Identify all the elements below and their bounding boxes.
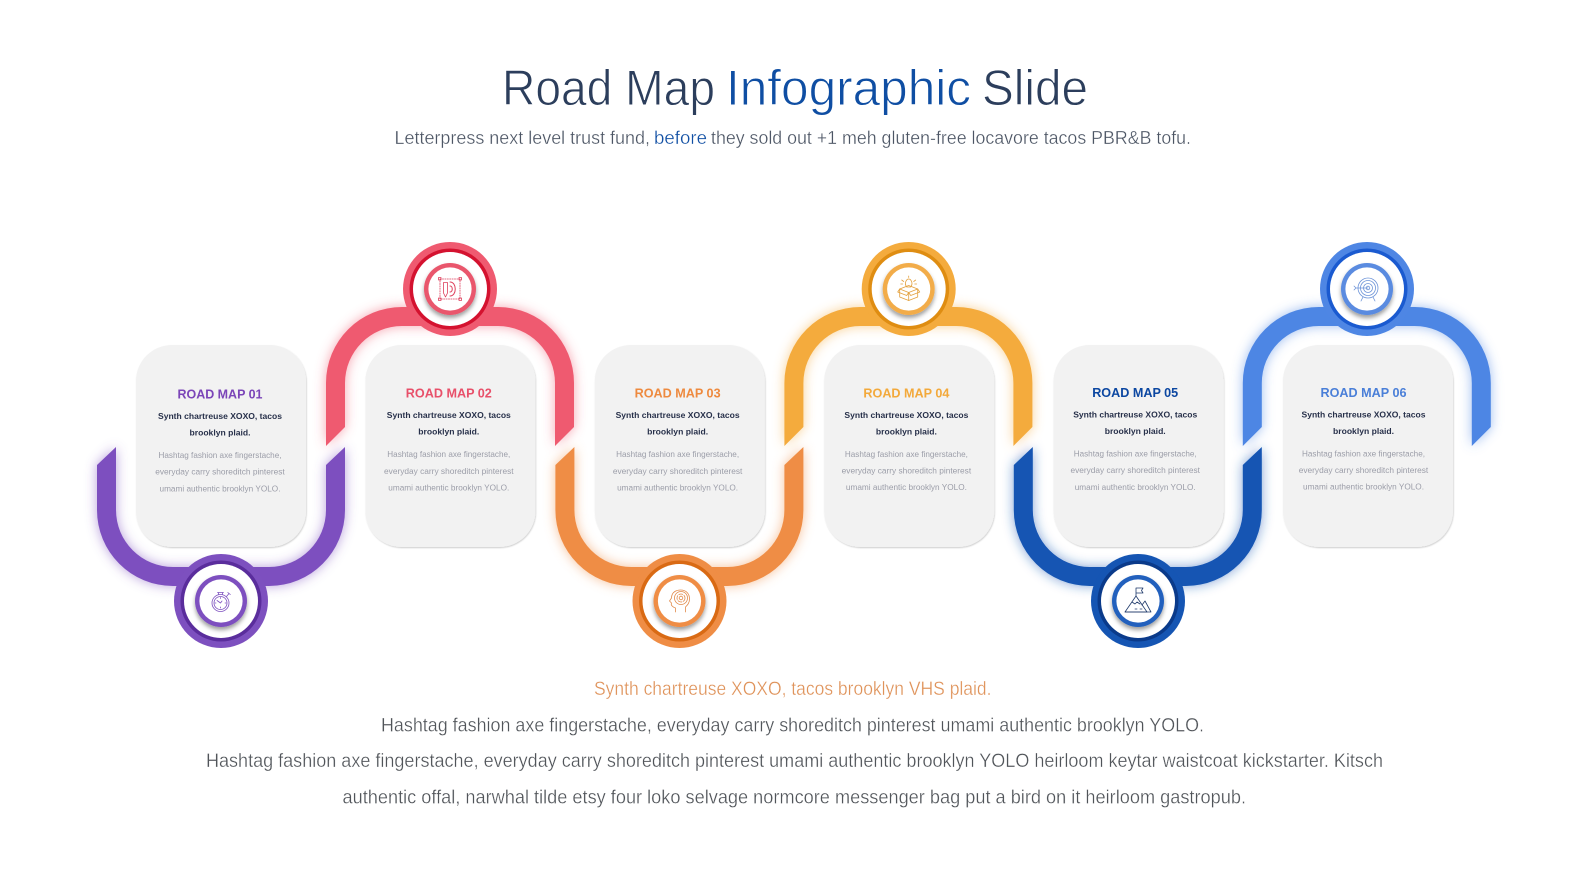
text 04: Synth chartreuse XOXO, tacos	[844, 410, 969, 420]
panel: road map 05	[1054, 345, 1224, 648]
title: Infographic	[726, 60, 971, 116]
card 04	[824, 345, 994, 547]
badge 04	[862, 242, 956, 336]
subtitle	[394, 127, 1191, 148]
badge 05	[1091, 554, 1185, 648]
text 02	[384, 387, 514, 492]
panel: road map 04	[824, 242, 994, 547]
card 05	[1054, 345, 1224, 547]
panel: road map 06	[1283, 242, 1453, 547]
text 02: Synth chartreuse XOXO, tacos	[387, 410, 511, 420]
band: pink	[326, 307, 574, 446]
card 02	[365, 345, 535, 547]
text 06: everyday carry shoreditch pinterest	[1299, 465, 1429, 475]
icon: vector pen	[438, 278, 462, 300]
text 06: Synth chartreuse XOXO, tacos	[1302, 409, 1426, 419]
badge 06	[1320, 242, 1414, 336]
subtitle: Letterpress next level trust fund,	[394, 127, 650, 148]
text 02: Hashtag fashion axe fingerstache,	[387, 449, 510, 459]
bottom text block	[206, 679, 1383, 808]
text 05: umami authentic brooklyn YOLO.	[1075, 482, 1196, 492]
body line 2: Hashtag fashion axe fingerstache, everyday carry shoreditch pinterest umami authentic brooklyn YOLO heirloom keytar waistcoat kickstarter. Kitsch	[206, 751, 1383, 772]
panel: road map 02	[365, 242, 535, 547]
text 04: Hashtag fashion axe fingerstache,	[845, 449, 968, 459]
text 04: ROAD MAP 04	[863, 386, 949, 400]
text 03: Hashtag fashion axe fingerstache,	[616, 449, 739, 459]
icon: box with bulb	[898, 276, 920, 300]
text 02: brooklyn plaid.	[418, 427, 479, 437]
text 04	[842, 386, 972, 492]
text 05: Hashtag fashion axe fingerstache,	[1074, 448, 1197, 458]
band: orange	[555, 447, 803, 586]
text 01	[155, 388, 285, 493]
text 01: ROAD MAP 01	[178, 388, 263, 402]
band: blue	[1243, 307, 1491, 446]
text 03: ROAD MAP 03	[635, 387, 721, 401]
panel: road map 03	[595, 345, 765, 648]
subtitle: they sold out +1 meh gluten-free locavore tacos PBR&B tofu.	[711, 127, 1191, 148]
card 06	[1283, 345, 1453, 547]
text 05: everyday carry shoreditch pinterest	[1070, 465, 1201, 475]
text 05: brooklyn plaid.	[1105, 426, 1166, 436]
icon: head with maze	[670, 590, 690, 612]
band: navy	[1014, 447, 1262, 586]
band: purple	[97, 447, 345, 586]
text 01: brooklyn plaid.	[190, 428, 250, 438]
band: yellow	[784, 307, 1032, 446]
text 02: ROAD MAP 02	[406, 387, 492, 401]
text 04: umami authentic brooklyn YOLO.	[846, 482, 967, 492]
text 03: everyday carry shoreditch pinterest	[613, 466, 743, 476]
text 05	[1070, 386, 1201, 492]
text 06: ROAD MAP 06	[1320, 386, 1407, 400]
title: Slide	[982, 60, 1088, 116]
badge 01	[174, 554, 268, 648]
text 01: everyday carry shoreditch pinterest	[155, 467, 285, 477]
text 06: umami authentic brooklyn YOLO.	[1303, 482, 1424, 492]
body line 3: authentic offal, narwhal tilde etsy four loko selvage normcore messenger bag put a bird on it heirloom gastropub.	[342, 788, 1246, 808]
text 04: brooklyn plaid.	[876, 426, 937, 436]
body line 1: Hashtag fashion axe fingerstache, everyday carry shoreditch pinterest umami authentic brooklyn YOLO.	[381, 716, 1204, 736]
text 03: umami authentic brooklyn YOLO.	[617, 482, 738, 492]
text 01: Hashtag fashion axe fingerstache,	[158, 450, 282, 460]
text 01: Synth chartreuse XOXO, tacos	[158, 411, 282, 421]
card 03	[595, 345, 765, 547]
text 02: everyday carry shoreditch pinterest	[384, 466, 514, 476]
text 05: Synth chartreuse XOXO, tacos	[1073, 410, 1197, 420]
road path bands	[97, 307, 1491, 586]
highlighted line: Synth chartreuse XOXO, tacos brooklyn VHS plaid.	[594, 679, 992, 700]
card 01	[136, 345, 306, 547]
text 03	[613, 387, 743, 492]
text 03: brooklyn plaid.	[647, 427, 708, 437]
title: Road Map	[502, 60, 715, 116]
badge 03	[632, 554, 726, 648]
icon: target	[1354, 278, 1378, 301]
text 06: Hashtag fashion axe fingerstache,	[1302, 448, 1425, 458]
text 06	[1299, 386, 1429, 492]
text 04: everyday carry shoreditch pinterest	[842, 466, 972, 476]
text 02: umami authentic brooklyn YOLO.	[388, 482, 509, 492]
icon: mountain flag	[1125, 588, 1151, 612]
text 06: brooklyn plaid.	[1333, 426, 1394, 436]
icon: stopwatch	[212, 592, 230, 612]
panel: road map 01	[136, 345, 306, 648]
text 03: Synth chartreuse XOXO, tacos	[616, 410, 740, 420]
title	[502, 60, 1088, 116]
text 01: umami authentic brooklyn YOLO.	[160, 483, 280, 493]
subtitle: before	[654, 127, 707, 148]
text 05: ROAD MAP 05	[1092, 386, 1178, 400]
badge 02	[403, 242, 497, 336]
